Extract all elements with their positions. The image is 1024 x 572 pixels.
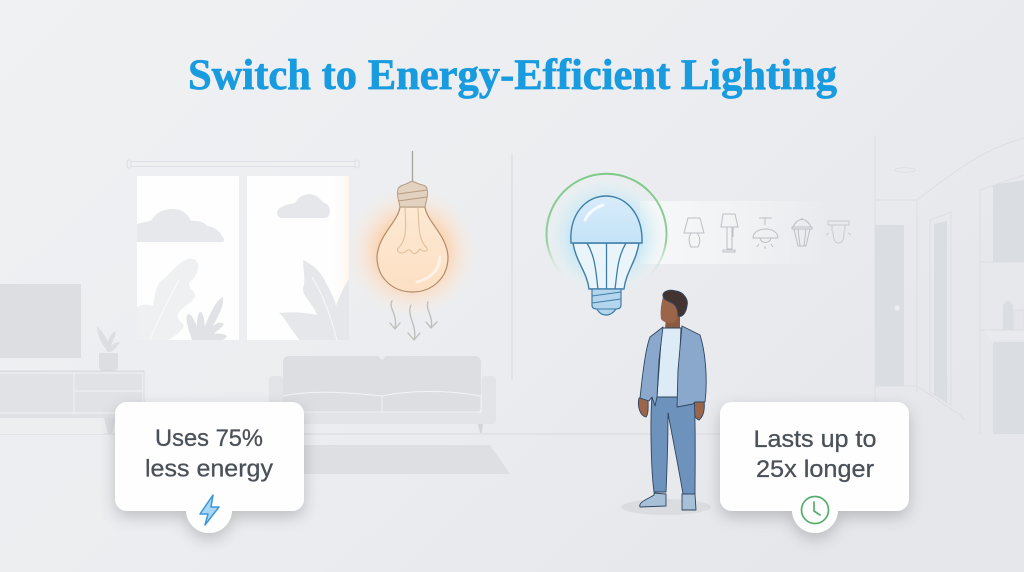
sconce	[826, 221, 851, 243]
scene: sofa	[269, 356, 496, 433]
small plant	[187, 297, 227, 340]
green ring	[546, 174, 666, 278]
floor lamp	[721, 214, 738, 252]
left cloud	[137, 209, 224, 242]
hair	[663, 290, 687, 316]
title: Switch to Energy-Efficient Lighting	[188, 52, 837, 99]
scene: floor line	[0, 433, 875, 435]
heat arrows	[390, 301, 437, 340]
fixture icons	[684, 214, 851, 252]
incandescent bulb	[346, 151, 478, 318]
highlight	[417, 257, 440, 282]
dome	[571, 196, 642, 243]
trousers	[651, 396, 695, 494]
callout text: Lasts up to	[754, 426, 876, 453]
scene: dividing line	[511, 153, 513, 380]
callout text: Uses 75%	[155, 425, 263, 452]
screw base	[398, 181, 428, 207]
face	[661, 294, 682, 323]
left plant	[137, 259, 198, 340]
table lamp	[684, 218, 704, 247]
callout: uses less energy: less energy	[145, 456, 274, 482]
scene: curtain rod	[127, 160, 359, 168]
right plant	[279, 260, 349, 340]
base	[592, 289, 621, 315]
scene: media console	[0, 371, 144, 434]
hands	[638, 398, 648, 417]
highlight	[585, 205, 603, 220]
callout: uses less energy	[115, 402, 304, 533]
lower body	[573, 243, 639, 289]
shoes	[640, 493, 666, 507]
scene: hallway and kitchen	[875, 136, 1024, 434]
shirt	[657, 328, 681, 397]
icon: lightning bolt	[200, 495, 219, 525]
scene: potted plant	[97, 326, 120, 371]
scene: rug	[270, 445, 510, 474]
person	[621, 290, 711, 515]
neck	[665, 312, 680, 334]
shadow	[621, 499, 711, 515]
callout: lasts longer: 25x longer	[756, 456, 874, 483]
lantern	[792, 218, 812, 246]
LED bulb	[546, 174, 666, 315]
scene: window with clouds and plants	[137, 176, 349, 340]
filament	[398, 208, 427, 254]
icon: clock	[802, 496, 828, 524]
ceiling lamp	[753, 218, 778, 249]
scene: TV	[0, 284, 81, 358]
right cloud	[277, 194, 330, 218]
jacket	[640, 326, 706, 407]
bulb glass	[377, 207, 448, 292]
fixtures strip	[640, 201, 830, 264]
callout: lasts longer	[720, 402, 909, 533]
